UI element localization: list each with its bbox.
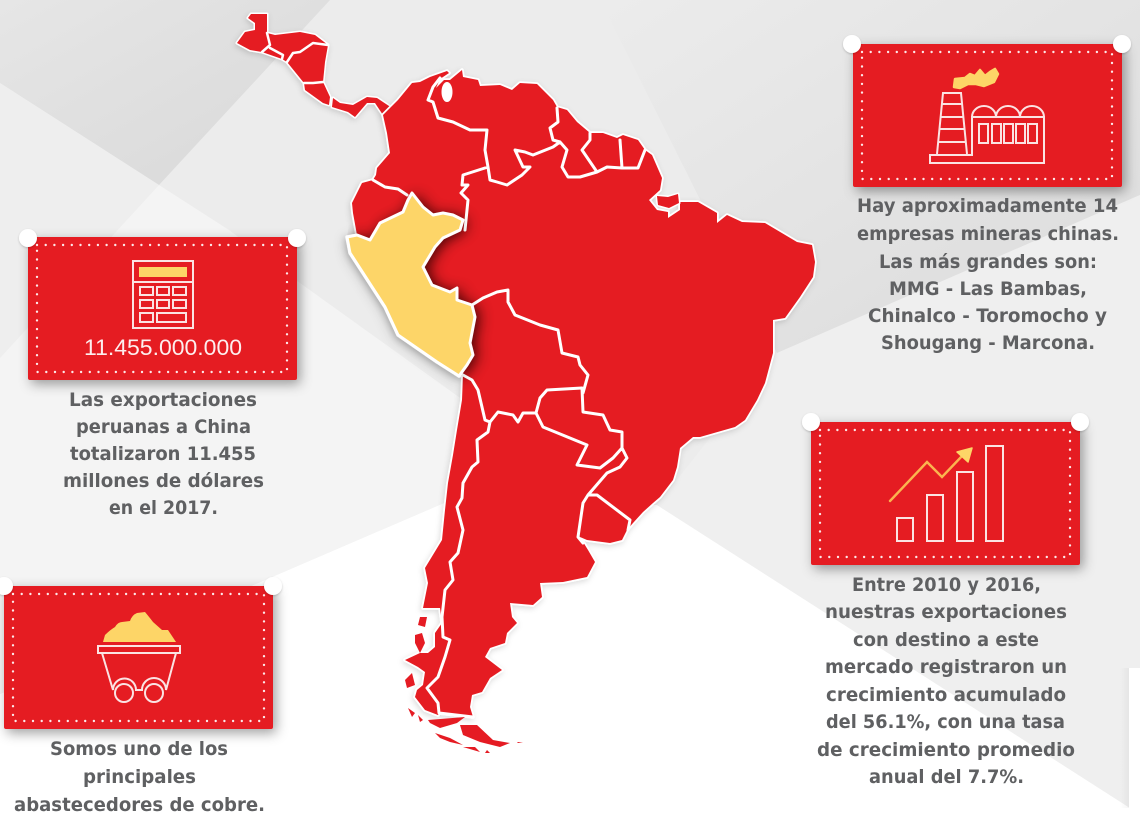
text: exports: en el 2017. [109, 497, 218, 519]
text: growth [817, 574, 1075, 788]
card: growth chart [802, 413, 1089, 565]
shadow cast by Peru on neighbouring countries [352, 194, 480, 377]
southern islands [405, 617, 523, 753]
text: growth: con destino a este [853, 629, 1039, 651]
Marajo island [657, 194, 679, 208]
map of Central and South America [237, 14, 815, 753]
text: growth: Entre 2010 y 2016, [852, 574, 1041, 596]
text: exports: Las exportaciones [69, 389, 257, 411]
country borders [373, 78, 645, 717]
icon: factory with smoke [930, 69, 1044, 163]
text: growth: nuestras exportaciones [825, 601, 1067, 623]
text: exports: peruanas a China [76, 416, 251, 438]
Lake Maracaibo [442, 82, 452, 102]
text: mining companies: Chinalco - Toromocho y [868, 305, 1108, 327]
amount: 11.455.000.000 [84, 335, 242, 360]
text: growth: mercado registraron un [825, 656, 1067, 678]
card: mine cart [0, 577, 282, 729]
text: copper: Somos uno de los [50, 738, 228, 760]
text: copper: abastecedores de cobre. [14, 794, 265, 816]
text: exports: totalizaron 11.455 [70, 443, 256, 465]
South America continent [347, 70, 815, 717]
icon: calculator [133, 261, 193, 328]
icon: mine cart with copper [98, 612, 180, 702]
text: mining companies: Hay aproximadamente 14 [857, 195, 1118, 217]
card: calculator [19, 229, 306, 380]
text: growth: crecimiento acumulado [826, 684, 1066, 706]
text: mining companies: Shougang - Marcona. [881, 332, 1095, 354]
text: mining companies: MMG - Las Bambas, [889, 278, 1087, 300]
text: copper [14, 738, 265, 816]
text: growth: del 56.1%, con una tasa [826, 711, 1065, 733]
text: growth: anual del 7.7%. [869, 766, 1024, 788]
text: mining companies [857, 195, 1119, 354]
card: factory [843, 35, 1131, 187]
text: copper: principales [83, 766, 196, 788]
Peru highlighted [347, 193, 475, 376]
text: mining companies: empresas mineras chinas. [857, 223, 1119, 245]
text: exports: millones de dólares [63, 470, 264, 492]
text: exports [63, 389, 264, 519]
text: growth: de crecimiento promedio [817, 739, 1075, 761]
Central America [237, 14, 392, 117]
icon: rising bars and arrow [890, 446, 1003, 541]
text: mining companies: Las más grandes son: [879, 251, 1097, 273]
